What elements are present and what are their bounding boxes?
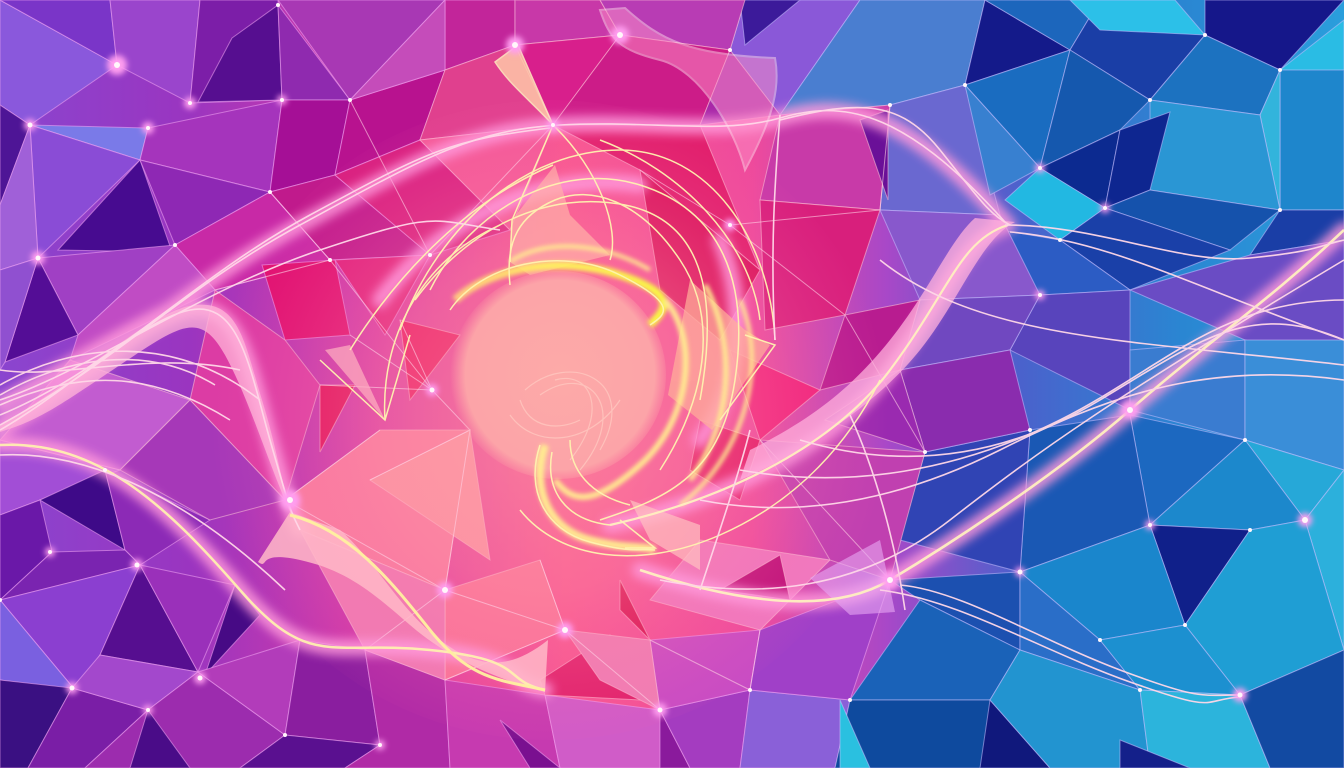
bottom left — [0, 440, 120, 515]
ribbons: glow layer — [0, 111, 1344, 690]
spiral: pale petals — [325, 165, 770, 570]
triangle mesh: pink centre — [0, 0, 925, 710]
spiral: crisp lines — [320, 125, 880, 556]
ribbon: right swoosh — [740, 218, 1015, 480]
triangle mesh: purple left field — [0, 0, 890, 768]
fine mesh lines over the centre — [215, 100, 925, 710]
spiral: bright curves — [455, 246, 752, 550]
triangle mesh: blue right field — [730, 0, 1344, 768]
central disc — [450, 271, 666, 479]
ribbon: top petal — [495, 45, 553, 125]
ribbon: lower right veil — [810, 540, 895, 615]
central soft glow — [210, 100, 890, 740]
spiral: inner swirl — [510, 372, 620, 470]
ribbon: lower left swoosh — [258, 512, 548, 692]
ribbon: crown petal — [600, 8, 777, 170]
ribbons: bright line bundles — [0, 108, 1344, 703]
ribbon: left swoosh — [0, 305, 296, 525]
